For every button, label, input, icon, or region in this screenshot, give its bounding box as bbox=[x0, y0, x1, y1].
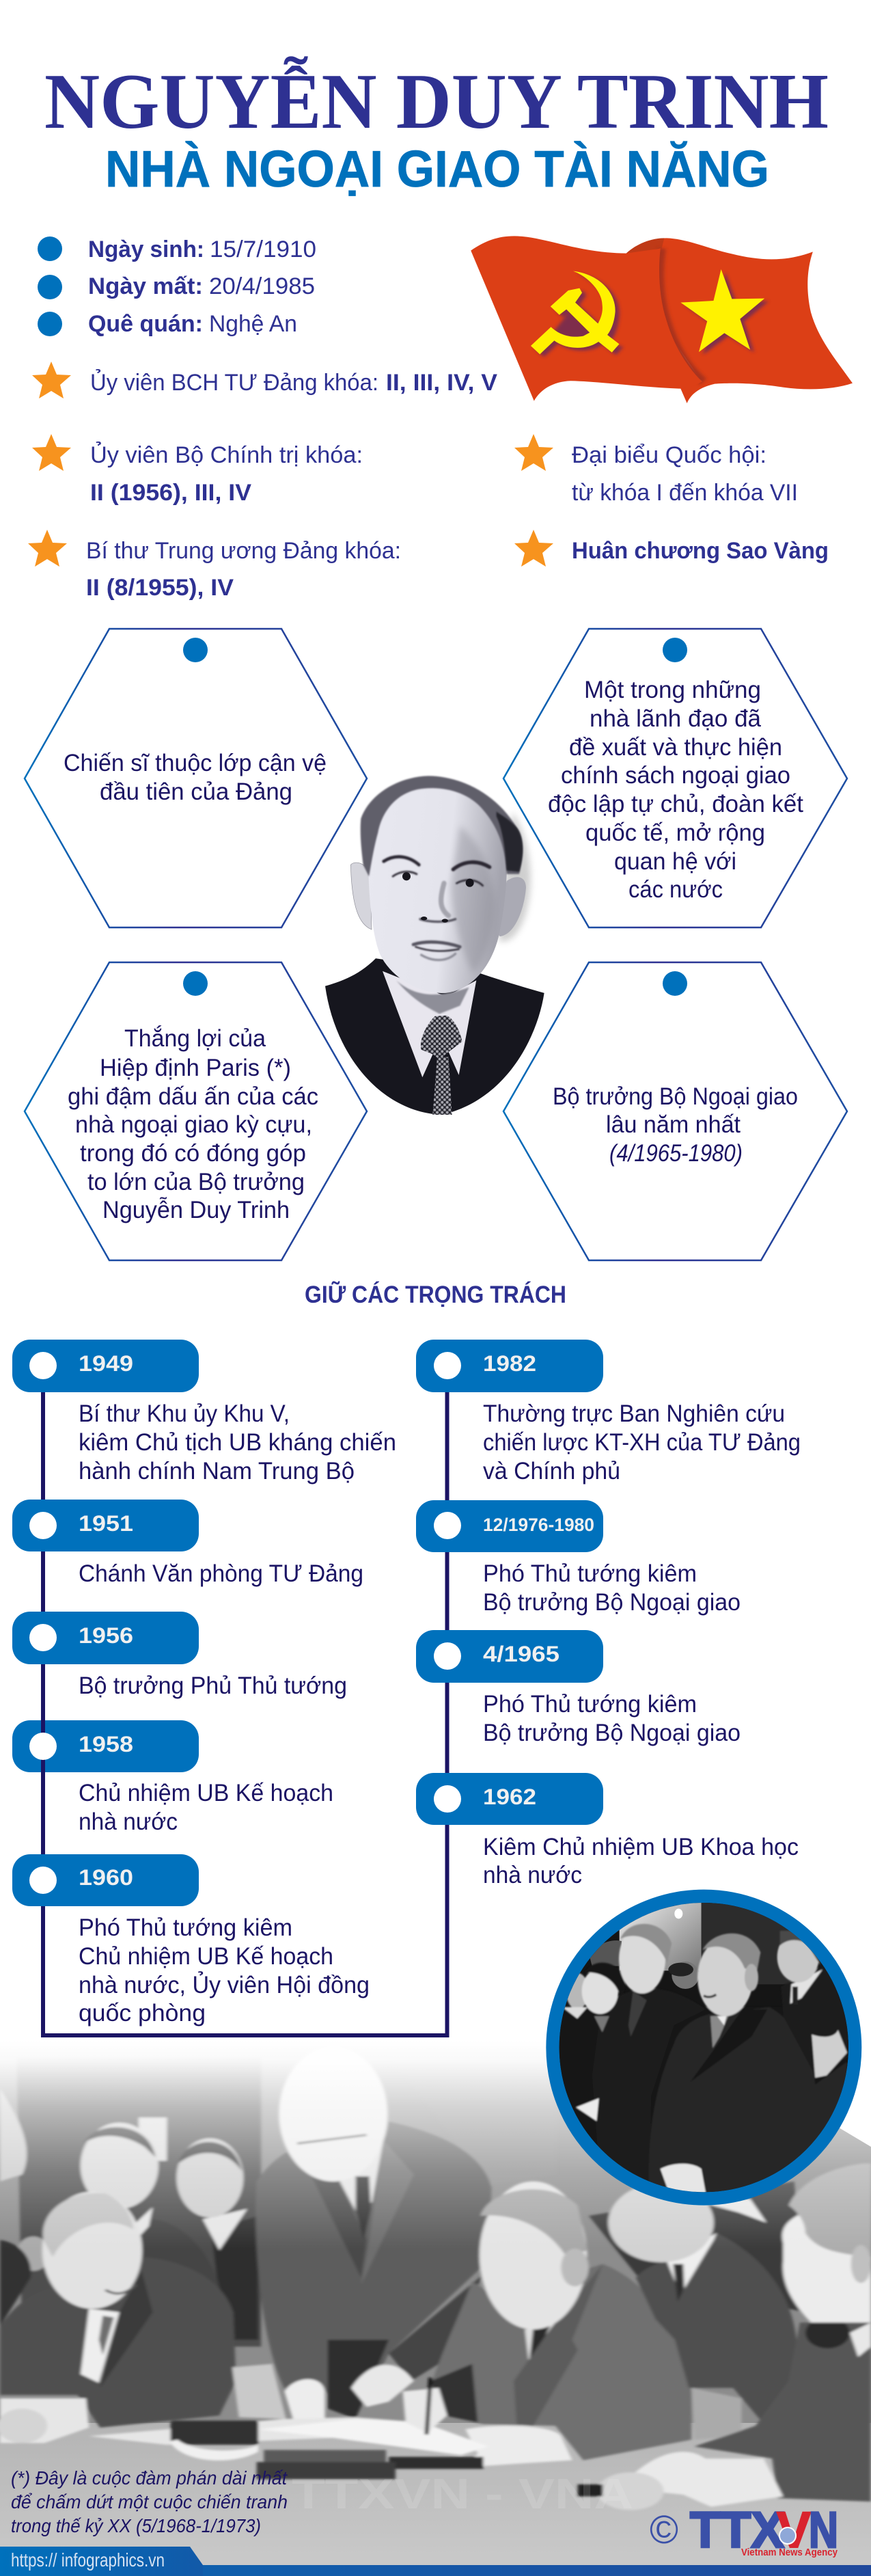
panel: hexagon top right: quốc tế, mở rộng bbox=[585, 819, 765, 846]
footnote: trong thế kỷ XX (5/1968-1/1973) bbox=[11, 2515, 261, 2536]
home town: Quê quán: bbox=[88, 311, 203, 337]
national assembly: từ khóa I đến khóa VII bbox=[572, 480, 798, 506]
timeline frame bbox=[43, 1392, 447, 2035]
national assembly bbox=[514, 434, 798, 506]
seated man behind bbox=[636, 2233, 797, 2421]
national assembly: Đại biểu Quốc hội: bbox=[572, 442, 766, 468]
birth date: Ngày sinh: bbox=[88, 236, 204, 262]
home town bbox=[38, 311, 297, 337]
timeline entry 12/1976-1980 bbox=[416, 1500, 741, 1616]
timeline entry 1958: Chủ nhiệm UB Kế hoạch bbox=[79, 1780, 333, 1806]
panel: hexagon top right: độc lập tự chủ, đoàn kết bbox=[548, 791, 803, 817]
logo: TTXVN: Vietnam News Agency bbox=[741, 2547, 838, 2558]
timeline entry 1960: quốc phòng bbox=[79, 2000, 206, 2026]
panel: hexagon bottom right: lâu năm nhất bbox=[606, 1111, 741, 1138]
panel: hexagon top right: các nước bbox=[628, 876, 723, 903]
party secretariat bbox=[28, 530, 401, 601]
timeline entry 1982: chiến lược KT-XH của TƯ Đảng bbox=[483, 1429, 801, 1456]
panel: hexagon top right: nhà lãnh đạo đã bbox=[590, 705, 762, 732]
icon: party and national flag bbox=[471, 236, 853, 403]
panel: hexagon bottom left: Nguyễn Duy Trinh bbox=[102, 1197, 290, 1223]
panel: hexagon top right: quan hệ với bbox=[614, 848, 736, 875]
panel: hexagon top right: Một trong những bbox=[584, 677, 761, 703]
timeline entry 1962: nhà nước bbox=[483, 1862, 582, 1888]
timeline entry 1956: Bộ trưởng Phủ Thủ tướng bbox=[79, 1672, 347, 1699]
birth date: 15/7/1910 bbox=[210, 236, 316, 262]
timeline entry 1960 bbox=[12, 1854, 370, 2026]
seated man left bbox=[0, 2257, 236, 2428]
central committee: II, III, IV, V bbox=[386, 370, 497, 396]
timeline entry 1960: nhà nước, Ủy viên Hội đồng bbox=[79, 1971, 370, 1998]
timeline entry 1949: hành chính Nam Trung Bộ bbox=[79, 1458, 355, 1484]
right man bbox=[694, 2322, 871, 2502]
timeline entry 1982 bbox=[416, 1340, 801, 1484]
timeline entry 1949: 1949 bbox=[79, 1351, 133, 1376]
timeline entry 1960: Chủ nhiệm UB Kế hoạch bbox=[79, 1943, 333, 1970]
timeline entry 1949: kiêm Chủ tịch UB kháng chiến bbox=[79, 1429, 396, 1456]
timeline entry 1982: và Chính phủ bbox=[483, 1458, 620, 1484]
panel: hexagon bottom right: Bộ trưởng Bộ Ngoại giao bbox=[553, 1083, 798, 1110]
timeline entry 1956: 1956 bbox=[79, 1623, 133, 1648]
footnote: (*) Đây là cuộc đàm phán dài nhất bbox=[11, 2467, 288, 2489]
standing man bbox=[255, 2119, 492, 2419]
central committee: Ủy viên BCH TƯ Đảng khóa: bbox=[90, 370, 378, 396]
footer bar bbox=[0, 2565, 871, 2576]
circular photo bbox=[553, 1896, 855, 2199]
timeline entry 12/1976-1980: 12/1976-1980 bbox=[483, 1515, 594, 1535]
timeline entry 1960: Phó Thủ tướng kiêm bbox=[79, 1914, 292, 1941]
panel: hexagon top left: đầu tiên của Đảng bbox=[100, 778, 292, 805]
panel: hexagon bottom right: (4/1965-1980) bbox=[609, 1140, 743, 1167]
politburo bbox=[32, 434, 363, 506]
timeline entry 4/1965 bbox=[416, 1630, 741, 1746]
timeline entry 1982: 1982 bbox=[483, 1351, 536, 1376]
panel: hexagon bottom left: Thắng lợi của bbox=[124, 1025, 266, 1052]
panel: hexagon top right: đề xuất và thực hiện bbox=[569, 734, 782, 761]
achievements list bbox=[28, 362, 829, 601]
logo: TTXVN: N bbox=[809, 2502, 838, 2558]
panel: hexagon bottom right bbox=[503, 962, 847, 1260]
central committee bbox=[32, 362, 497, 398]
gold star order bbox=[514, 530, 829, 567]
footer url tab bbox=[0, 2547, 203, 2576]
death date bbox=[38, 273, 315, 299]
personal details list bbox=[38, 236, 316, 337]
timeline entry 12/1976-1980: Phó Thủ tướng kiêm bbox=[483, 1560, 697, 1587]
signing man bbox=[430, 2264, 691, 2460]
panel: hexagon bottom left: ghi đậm dấu ấn của các bbox=[68, 1083, 318, 1110]
bottom photo: signing of the Paris agreement bbox=[0, 2040, 871, 2576]
politburo: Ủy viên Bộ Chính trị khóa: bbox=[90, 442, 363, 468]
title: NGUYỄN DUY TRINH bbox=[44, 57, 829, 145]
panel: hexagon top left: Chiến sĩ thuộc lớp cận vệ bbox=[64, 750, 327, 776]
birth date bbox=[38, 236, 316, 262]
timeline entry 1956 bbox=[12, 1612, 347, 1699]
subtitle: NHÀ NGOẠI GIAO TÀI NĂNG bbox=[105, 140, 769, 198]
timeline entry 1951 bbox=[12, 1500, 363, 1587]
timeline entry 12/1976-1980: Bộ trưởng Bộ Ngoại giao bbox=[483, 1589, 741, 1616]
timeline entry 1958 bbox=[12, 1720, 333, 1835]
wire service watermark: TTXVN - VNA bbox=[292, 2471, 633, 2518]
timeline entry 4/1965: 4/1965 bbox=[483, 1642, 559, 1666]
timeline entry 1958: nhà nước bbox=[79, 1808, 178, 1835]
logo: TTXVN: © bbox=[650, 2508, 678, 2552]
footnote bbox=[11, 2467, 288, 2536]
footnote: để chấm dứt một cuộc chiến tranh bbox=[11, 2491, 288, 2512]
party secretariat: Bí thư Trung ương Đảng khóa: bbox=[86, 538, 401, 564]
footer url tab: https:// infographics.vn bbox=[11, 2549, 165, 2571]
timeline entry 4/1965: Bộ trưởng Bộ Ngoại giao bbox=[483, 1720, 741, 1746]
timeline entry 1949 bbox=[12, 1340, 396, 1484]
panel: hexagon top right bbox=[503, 629, 847, 927]
timeline entry 1949: Bí thư Khu ủy Khu V, bbox=[79, 1400, 290, 1427]
timeline entry 1962 bbox=[416, 1773, 799, 1888]
section heading: GIỮ CÁC TRỌNG TRÁCH bbox=[305, 1281, 566, 1308]
panel: hexagon top left bbox=[25, 629, 367, 927]
timeline entry 4/1965: Phó Thủ tướng kiêm bbox=[483, 1691, 697, 1718]
timeline entry 1958: 1958 bbox=[79, 1732, 133, 1757]
politburo: II (1956), III, IV bbox=[90, 480, 251, 506]
timeline entry 1962: Kiêm Chủ nhiệm UB Khoa học bbox=[483, 1834, 799, 1860]
logo: TTXVN: TTX bbox=[690, 2502, 784, 2558]
home town: Nghệ An bbox=[209, 311, 297, 337]
timeline entry 1962: 1962 bbox=[483, 1785, 536, 1809]
table documents bbox=[92, 2415, 405, 2445]
logo: TTXVN bbox=[650, 2502, 838, 2558]
panel: hexagon bottom left: to lớn của Bộ trưởng bbox=[87, 1169, 305, 1195]
panel: hexagon bottom left: nhà ngoại giao kỳ cựu, bbox=[75, 1111, 312, 1138]
panel: hexagon bottom left: Hiệp định Paris (*) bbox=[100, 1055, 291, 1081]
timeline entry 1982: Thường trực Ban Nghiên cứu bbox=[483, 1400, 785, 1427]
death date: Ngày mất: bbox=[88, 273, 203, 299]
portrait photo bbox=[325, 776, 544, 1115]
panel: hexagon top right: chính sách ngoại giao bbox=[561, 762, 790, 789]
death date: 20/4/1985 bbox=[209, 273, 315, 299]
panel: hexagon bottom left: trong đó có đóng góp bbox=[80, 1140, 306, 1167]
gold star order: Huân chương Sao Vàng bbox=[572, 538, 829, 564]
timeline entry 1960: 1960 bbox=[79, 1865, 133, 1890]
timeline entry 1951: 1951 bbox=[79, 1511, 133, 1536]
timeline entry 1951: Chánh Văn phòng TƯ Đảng bbox=[79, 1560, 363, 1587]
party secretariat: II (8/1955), IV bbox=[86, 575, 234, 601]
panel: hexagon bottom left bbox=[25, 962, 367, 1260]
logo: TTXVN: V bbox=[777, 2502, 811, 2558]
